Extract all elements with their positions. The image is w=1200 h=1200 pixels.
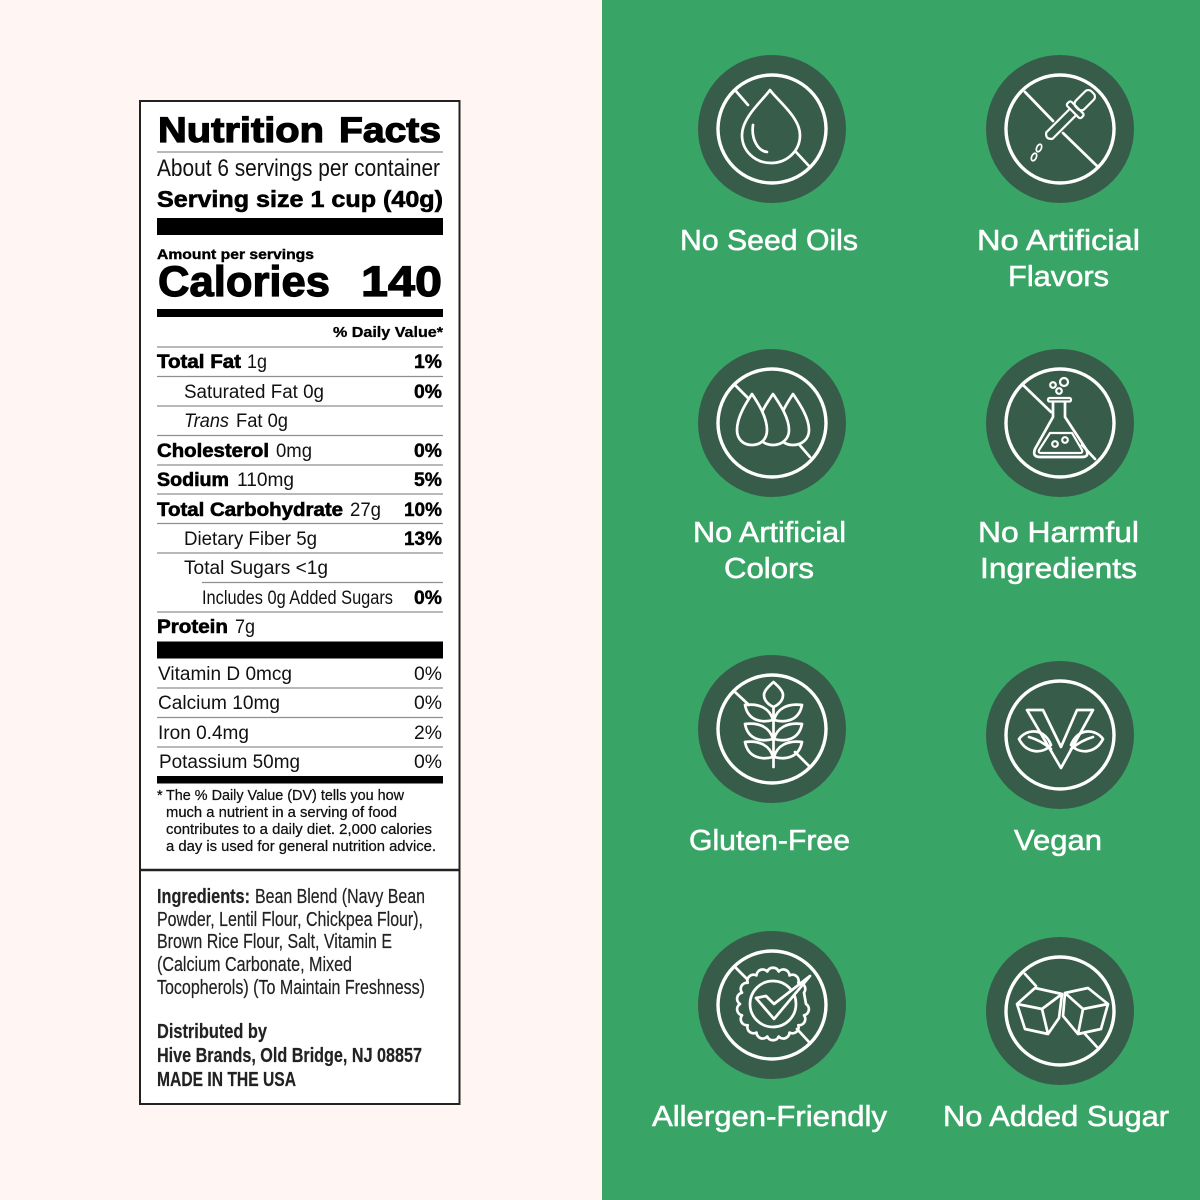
row: dietary fiber (184, 529, 442, 550)
calories (158, 258, 442, 306)
label: No Artificial Flavors (977, 225, 1140, 293)
label: No Artificial Colors: No Artificial (693, 517, 846, 549)
row: cholesterol: 0% (414, 441, 442, 462)
footnote: much a nutrient in a serving of food (166, 805, 397, 821)
row: total carbohydrate: 27g (350, 500, 381, 521)
row: potassium (159, 752, 442, 773)
icon: no seed oils (698, 55, 846, 203)
label: No Artificial Flavors: Flavors (1008, 261, 1109, 293)
calories: 140 (361, 258, 442, 306)
row: iron: 2% (414, 723, 442, 744)
heading: Nutrition Facts: Facts (339, 111, 441, 150)
row: vitamin D: Vitamin D 0mcg (158, 664, 292, 685)
footnote: The % Daily Value (DV) tells you how (166, 788, 405, 804)
row: saturated fat: 0% (414, 382, 442, 403)
ingredients: Tocopherols) (To Maintain Freshness) (157, 977, 425, 999)
ingredients: Powder, Lentil Flour, Chickpea Flour), (157, 909, 423, 931)
row: total fat: 1g (247, 352, 267, 373)
row: dietary fiber: Dietary Fiber 5g (184, 529, 317, 550)
row: protein: 7g (235, 617, 255, 638)
icon: allergen-friendly (698, 931, 846, 1079)
heading: Nutrition Facts: Nutrition (158, 111, 324, 150)
icon: gluten-free (698, 655, 846, 803)
row: vitamin D: 0% (414, 664, 442, 685)
heading: Nutrition Facts (158, 111, 441, 150)
distributor (157, 1021, 422, 1091)
icon: no artificial colors (698, 349, 846, 497)
distributor: Hive Brands, Old Bridge, NJ 08857 (157, 1045, 422, 1067)
row: protein: Protein (157, 617, 228, 638)
row: total carbohydrate: Total Carbohydrate (157, 500, 343, 521)
label: No Added Sugar: No Added Sugar (943, 1101, 1169, 1133)
row: potassium: Potassium 50mg (159, 752, 300, 773)
label: No Artificial Colors (693, 517, 846, 585)
icon: vegan (986, 661, 1134, 809)
footnote: a day is used for general nutrition advice. (166, 839, 436, 855)
row: added sugars: Includes 0g Added Sugars (202, 588, 393, 609)
row: sodium (157, 470, 442, 491)
row: cholesterol: 0mg (276, 441, 312, 462)
row: iron: Iron 0.4mg (158, 723, 249, 744)
ingredients: (Calcium Carbonate, Mixed (157, 954, 352, 976)
row: calcium: 0% (414, 693, 442, 714)
row: saturated fat: Saturated Fat 0g (184, 382, 324, 403)
calories: Calories (158, 258, 330, 306)
row: sodium: 5% (414, 470, 442, 491)
icon: no harmful ingredients (986, 349, 1134, 497)
footnote: * (157, 788, 163, 804)
row: cholesterol (157, 441, 442, 462)
ingredients: Bean Blend (Navy Bean (255, 886, 425, 908)
row: iron (158, 723, 442, 744)
label: No Artificial Flavors: No Artificial (977, 225, 1140, 257)
row: sodium: Sodium (157, 470, 229, 491)
row: sodium: 110mg (237, 470, 294, 491)
row: trans fat: Fat 0g (236, 411, 288, 432)
daily value heading: % Daily Value* (333, 324, 443, 341)
row: calcium (158, 693, 442, 714)
row: potassium: 0% (414, 752, 442, 773)
label: Vegan: Vegan (1014, 825, 1102, 857)
label: No Seed Oils: No Seed Oils (680, 225, 858, 257)
label: No Artificial Colors: Colors (724, 553, 814, 585)
servings per container: About 6 servings per container (157, 155, 440, 182)
footnote: contributes to a daily diet. 2,000 calories (166, 822, 432, 838)
label: No Harmful Ingredients (978, 517, 1139, 585)
row: total fat: Total Fat (157, 352, 242, 373)
row: total sugars: Total Sugars <1g (184, 558, 328, 579)
label: Gluten-Free: Gluten-Free (689, 825, 850, 857)
row: added sugars: 0% (414, 588, 442, 609)
row: trans fat: Trans (184, 411, 229, 432)
row: total fat: 1% (414, 352, 442, 373)
footnote (157, 788, 436, 855)
distributor: Distributed by (157, 1021, 268, 1043)
label: No Harmful Ingredients: Ingredients (980, 553, 1137, 585)
amount per servings: Amount per servings (157, 246, 314, 262)
row: trans fat (184, 411, 288, 432)
icon: no artificial flavors (986, 55, 1134, 203)
icon: no added sugar (986, 937, 1134, 1085)
ingredients: Ingredients: (157, 886, 250, 908)
ingredients: Brown Rice Flour, Salt, Vitamin E (157, 931, 392, 953)
row: saturated fat (184, 382, 442, 403)
distributor: MADE IN THE USA (157, 1069, 296, 1091)
row: total carbohydrate: 10% (404, 500, 442, 521)
row: calcium: Calcium 10mg (158, 693, 280, 714)
panel: nutrition label (140, 101, 460, 1104)
label: No Harmful Ingredients: No Harmful (978, 517, 1139, 549)
row: total carbohydrate (157, 500, 442, 521)
row: vitamin D (158, 664, 442, 685)
row: total fat (157, 352, 442, 373)
label: Allergen-Friendly: Allergen-Friendly (652, 1101, 888, 1133)
row: dietary fiber: 13% (404, 529, 442, 550)
row: cholesterol: Cholesterol (157, 441, 269, 462)
row: protein (157, 617, 255, 638)
serving size: Serving size 1 cup (40g) (157, 186, 443, 212)
ingredients (157, 886, 425, 999)
